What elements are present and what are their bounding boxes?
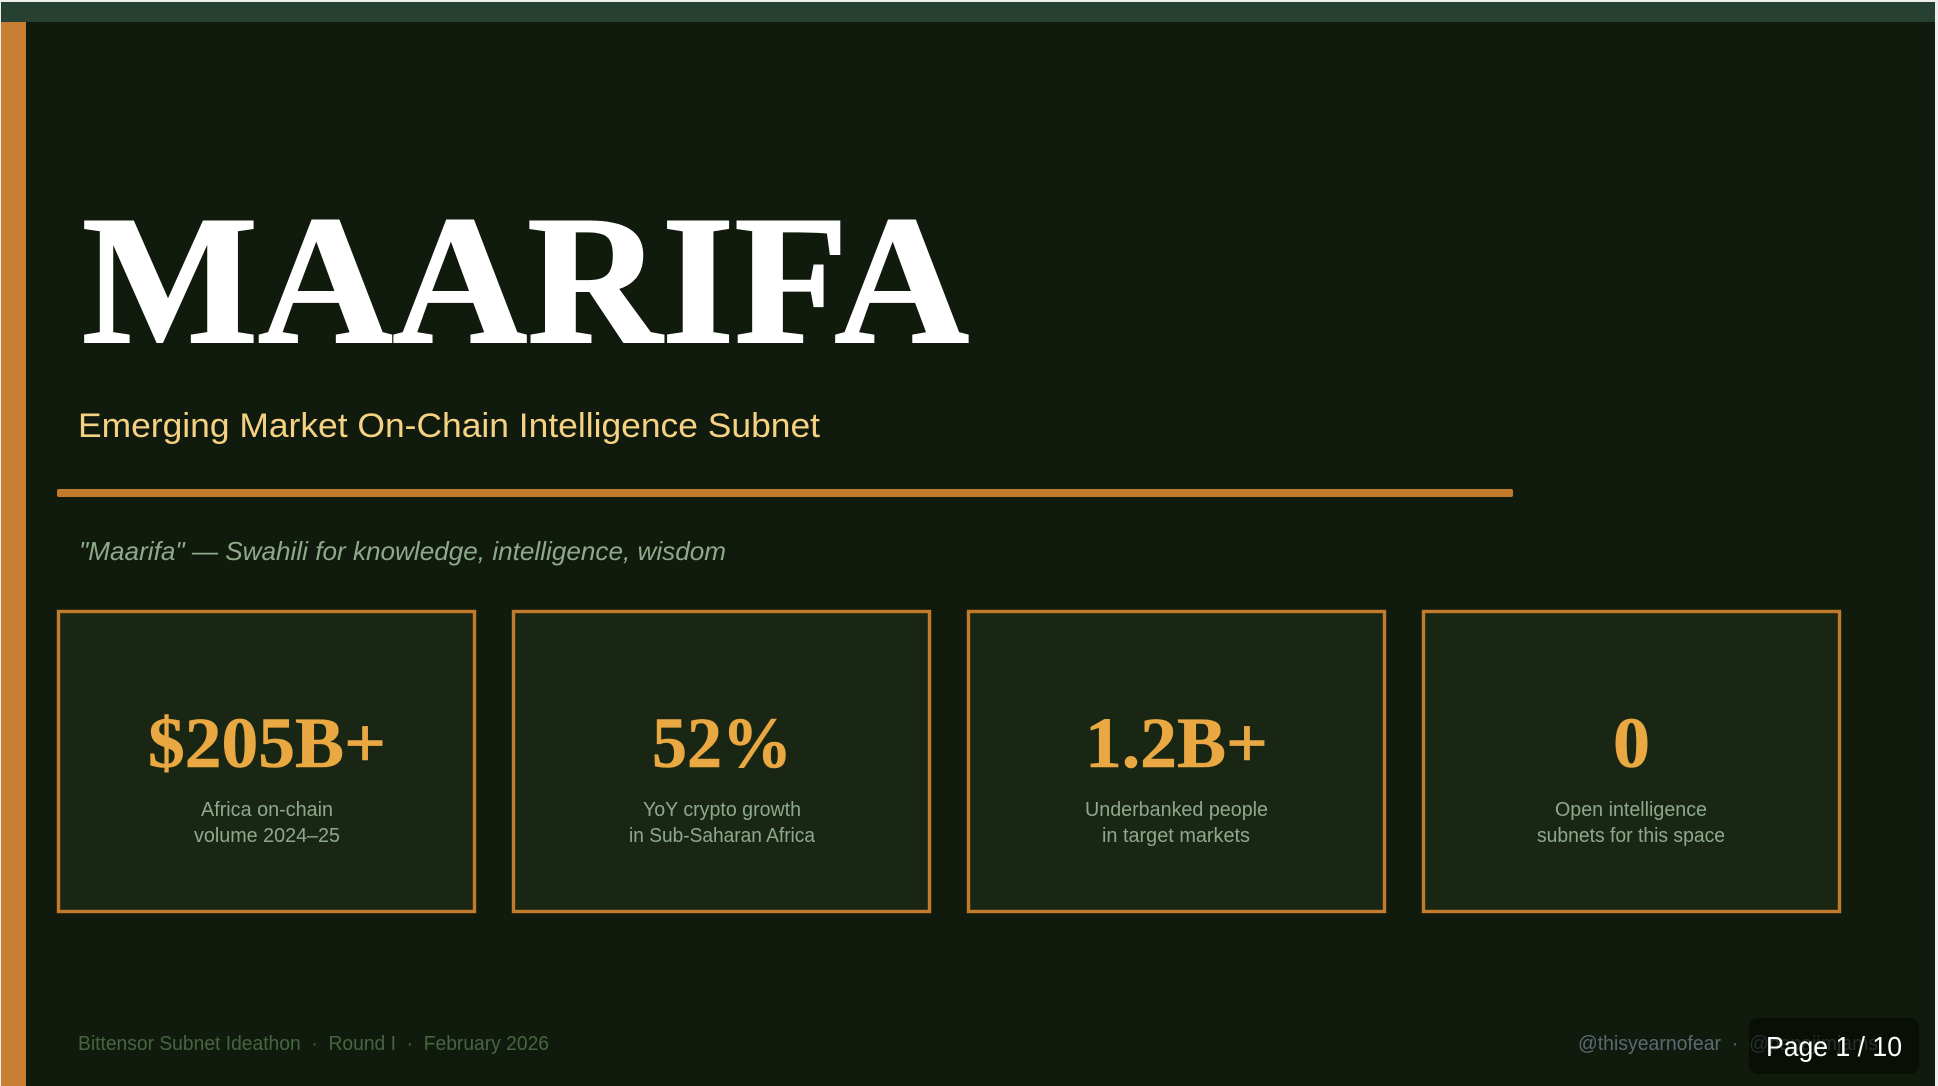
panel: stat card underbanked	[968, 612, 1384, 912]
stat label: YoY crypto growth	[643, 799, 801, 821]
stat label: in Sub-Saharan Africa	[629, 825, 816, 847]
panel: stat card open subnets	[1424, 612, 1840, 912]
stat label: in target markets	[1102, 825, 1250, 847]
stat value: 0	[1613, 703, 1650, 783]
footer event line: Bittensor Subnet Ideathon · Round I · February 2026	[78, 1033, 549, 1055]
subtitle: Emerging Market On-Chain Intelligence Subnet	[78, 407, 821, 445]
stat value: 1.2B+	[1085, 703, 1268, 783]
panel: stat card Africa volume	[58, 612, 474, 912]
divider rule	[57, 489, 1513, 497]
tagline: "Maarifa" — Swahili for knowledge, intelligence, wisdom	[79, 536, 726, 566]
stat value: 52%	[652, 703, 792, 783]
panel: stat card growth	[514, 612, 930, 912]
page badge: Page 1 / 10	[1766, 1031, 1902, 1062]
stat label: volume 2024–25	[194, 825, 340, 847]
top bar	[1, 2, 1935, 22]
stat value: $205B+	[148, 703, 386, 783]
stat label: Africa on-chain	[201, 799, 333, 821]
stat label	[194, 799, 340, 847]
stat label	[1537, 799, 1725, 847]
stat label	[1085, 799, 1268, 847]
stat label: subnets for this space	[1537, 825, 1725, 847]
page badge	[1749, 1018, 1919, 1074]
stat label: Open intelligence	[1555, 799, 1707, 821]
stat label	[629, 799, 816, 847]
left accent bar	[1, 22, 26, 1086]
title: MAARIFA	[82, 178, 969, 382]
footer credits: @thisyearnofear · @papajimjams	[1578, 1033, 1878, 1055]
stat label: Underbanked people	[1085, 799, 1268, 821]
